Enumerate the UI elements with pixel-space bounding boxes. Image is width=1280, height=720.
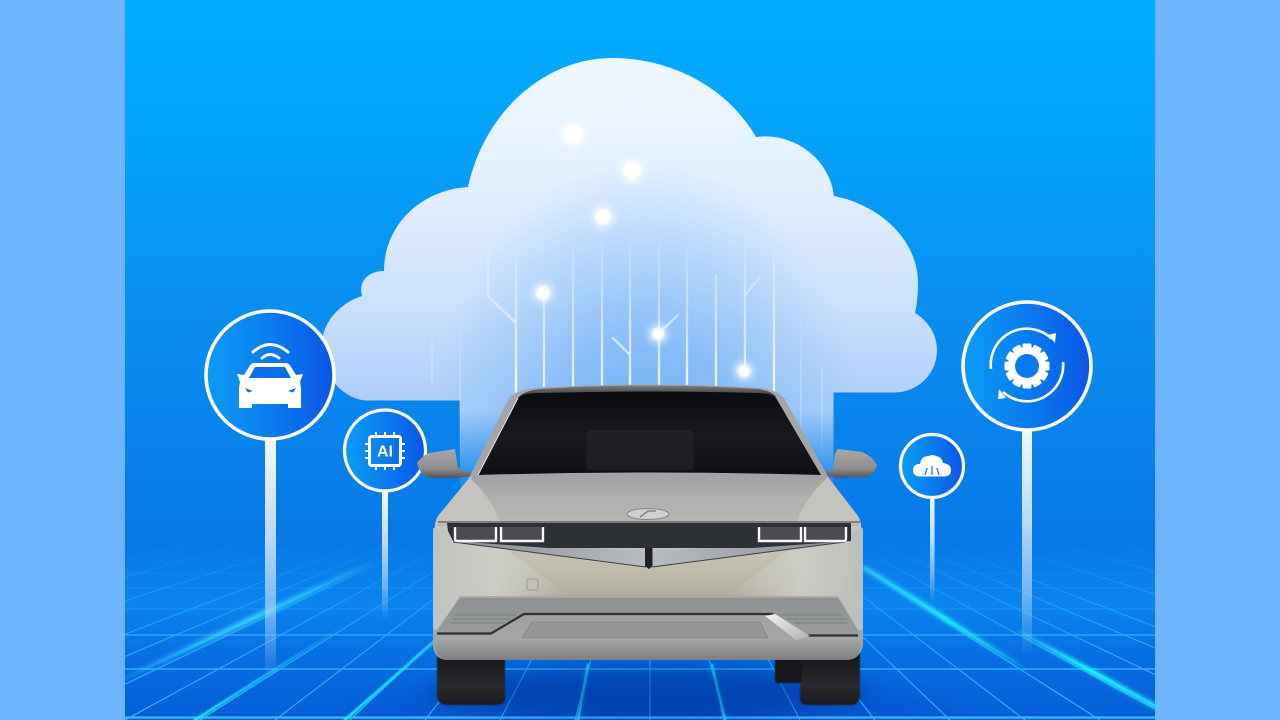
icon: cloud network badge	[900, 434, 964, 498]
cloud circuit lines	[431, 250, 823, 460]
car sensor square	[527, 579, 538, 590]
car roof	[519, 386, 776, 405]
cloud glowing nodes	[532, 120, 754, 381]
car chrome accent	[765, 614, 810, 640]
car wheels	[437, 640, 860, 705]
pole: car badge	[265, 440, 276, 680]
car center plate	[522, 622, 768, 638]
icon: connected car badge	[206, 311, 334, 439]
car hood	[437, 474, 859, 526]
car headlights	[455, 527, 846, 541]
car body	[433, 474, 863, 660]
pole: gear badge	[1022, 431, 1032, 656]
icon: AI chip badge: AI	[377, 444, 393, 460]
car lower grille	[437, 598, 858, 636]
car hyundai emblem	[627, 508, 669, 520]
floor light beams	[125, 560, 1155, 720]
icon: gear cycle badge	[963, 302, 1091, 430]
pole: cloud badge	[930, 498, 934, 603]
perspective grid floor	[125, 558, 1155, 720]
car interior	[586, 430, 694, 470]
car hood crease line	[438, 521, 860, 523]
car windshield	[478, 392, 821, 475]
car lamp band	[447, 523, 851, 548]
car right side panel	[726, 528, 863, 630]
car grille dark line	[437, 614, 858, 636]
car windshield edge	[478, 398, 518, 475]
car mirrors	[417, 449, 877, 478]
icon: AI chip badge	[344, 410, 426, 491]
cloud	[322, 58, 937, 500]
car ground shadow	[426, 668, 870, 716]
car grille stripes	[450, 615, 848, 623]
pole: AI badge	[382, 492, 388, 620]
car fender highlights	[437, 478, 860, 524]
car bumper	[435, 615, 861, 660]
car left side panel	[433, 528, 570, 630]
car greenhouse	[468, 384, 830, 480]
car	[417, 384, 877, 716]
car silver V trim	[453, 542, 845, 567]
